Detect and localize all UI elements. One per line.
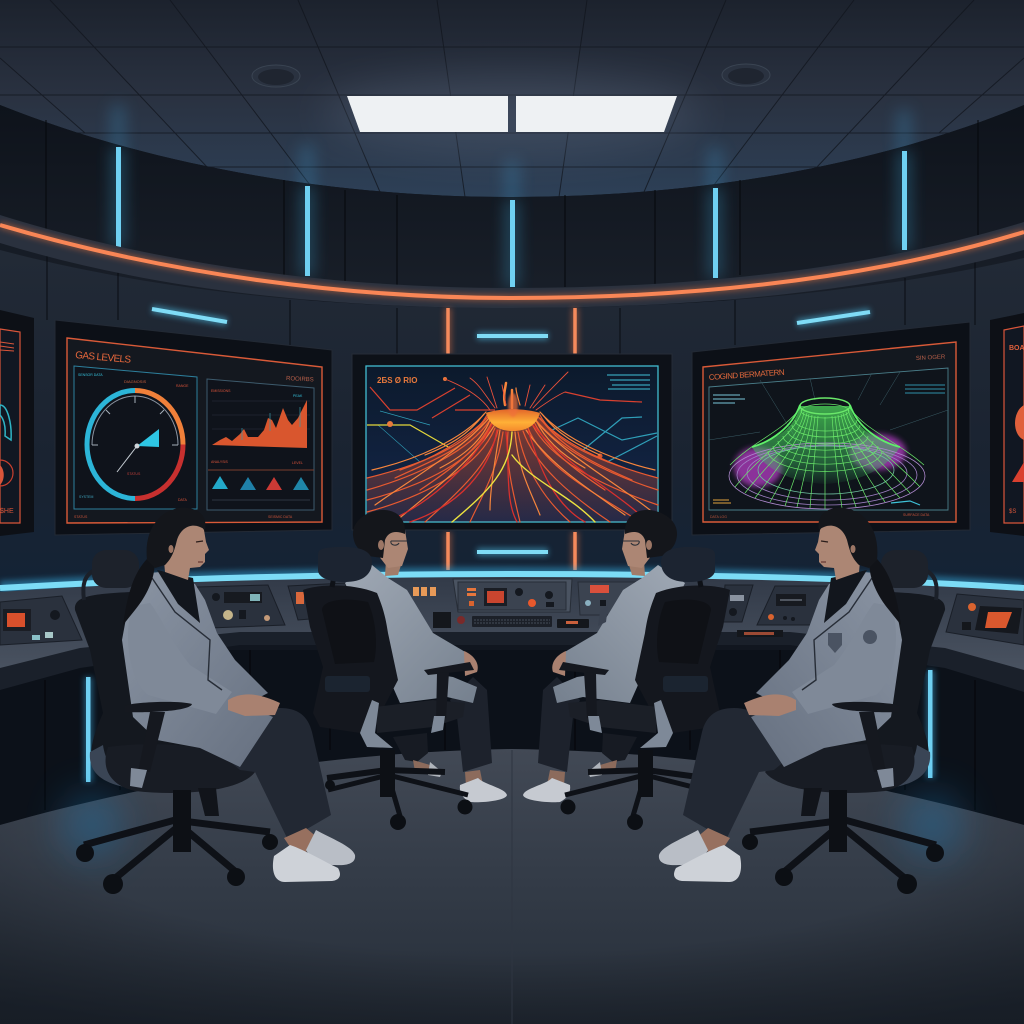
chart panel: LEVEL <box>292 461 303 465</box>
heading: gas levels: GAS LEVELS <box>75 350 132 366</box>
panel far right <box>946 594 1024 645</box>
console base <box>0 650 1024 825</box>
hazard icons <box>212 476 309 490</box>
chart panel: PEAK <box>293 394 303 398</box>
floor <box>0 749 1024 1024</box>
strip glow <box>0 574 1024 588</box>
chart panel: EMISSIONS <box>211 389 231 393</box>
person: seated scientist, far right <box>659 508 945 894</box>
monitor: gas levels <box>55 320 332 535</box>
gauge panel: DIAGNOSIS <box>124 379 147 384</box>
chart panel: ANALYSIS <box>211 460 229 464</box>
person: seated scientist, inner right <box>523 510 730 830</box>
volcano flank glow <box>367 414 658 522</box>
person: seated scientist, inner left <box>303 510 507 830</box>
coat pocket badge <box>828 633 842 653</box>
sleeve badge <box>863 630 877 644</box>
ceiling light glow <box>322 74 702 154</box>
heading: COGIND BERMATERN <box>709 368 785 382</box>
left lower strip <box>84 677 93 782</box>
console desk <box>0 577 1024 672</box>
monitor: volcano map <box>352 354 672 530</box>
blue console strip <box>0 574 1024 588</box>
upper wall <box>0 105 1024 300</box>
area chart <box>212 400 307 448</box>
gauge dial: SYSTEM <box>79 495 93 499</box>
heading: 2БS Ø RIO <box>377 376 417 385</box>
monitor: ground deformation: DATA LOG <box>710 515 727 519</box>
ceiling vent right <box>722 64 770 86</box>
monitor: gas levels: SEISMIC DATA <box>268 515 293 519</box>
mesh panel <box>709 368 948 510</box>
label: SIN OGER <box>916 354 946 362</box>
monitor: ground deformation <box>692 322 970 535</box>
monitor: ground deformation: SURFACE DATA <box>903 513 930 517</box>
volcano flows <box>367 372 658 522</box>
curved fascia with orange light band <box>0 215 1024 308</box>
control console <box>0 574 1024 825</box>
strip glows <box>113 147 909 287</box>
monitor: gas levels: STATUS <box>74 515 88 519</box>
sleeve badge <box>598 606 608 626</box>
blue vertical light strips <box>116 147 907 287</box>
side monitor right <box>990 313 1024 536</box>
gauge panel <box>74 366 197 509</box>
panel far left <box>0 596 82 645</box>
network lines <box>367 387 657 462</box>
panel left <box>197 585 285 628</box>
side monitor left: $HE <box>0 508 14 515</box>
person: seated scientist, far left <box>75 508 355 894</box>
ceiling light right <box>516 96 677 132</box>
crater <box>486 409 540 431</box>
ceiling blue wash <box>112 105 910 198</box>
ceiling <box>0 0 1024 198</box>
side monitor right: $S <box>1009 509 1016 515</box>
ceiling light left <box>347 96 508 132</box>
dome mesh chart <box>729 398 925 509</box>
gauge dial: STATUS <box>127 472 141 476</box>
ceiling vent left <box>252 65 300 87</box>
gauge panel: RANGE <box>176 384 189 388</box>
label: rooirbs: ROOIRBS <box>286 376 314 383</box>
right lower strip <box>926 670 935 778</box>
side monitor left <box>0 310 34 536</box>
gauge dial <box>79 390 187 502</box>
chart panel <box>207 379 314 510</box>
gauge panel: SENSOR DATA <box>78 373 103 377</box>
data lines <box>607 375 650 389</box>
gauge dial: DATA <box>178 498 187 502</box>
panel right <box>722 585 830 637</box>
panel center <box>453 579 589 628</box>
accent lights <box>152 308 870 570</box>
lower wall <box>0 250 1024 600</box>
panel left inner <box>288 583 465 628</box>
panel right inner <box>578 582 640 615</box>
